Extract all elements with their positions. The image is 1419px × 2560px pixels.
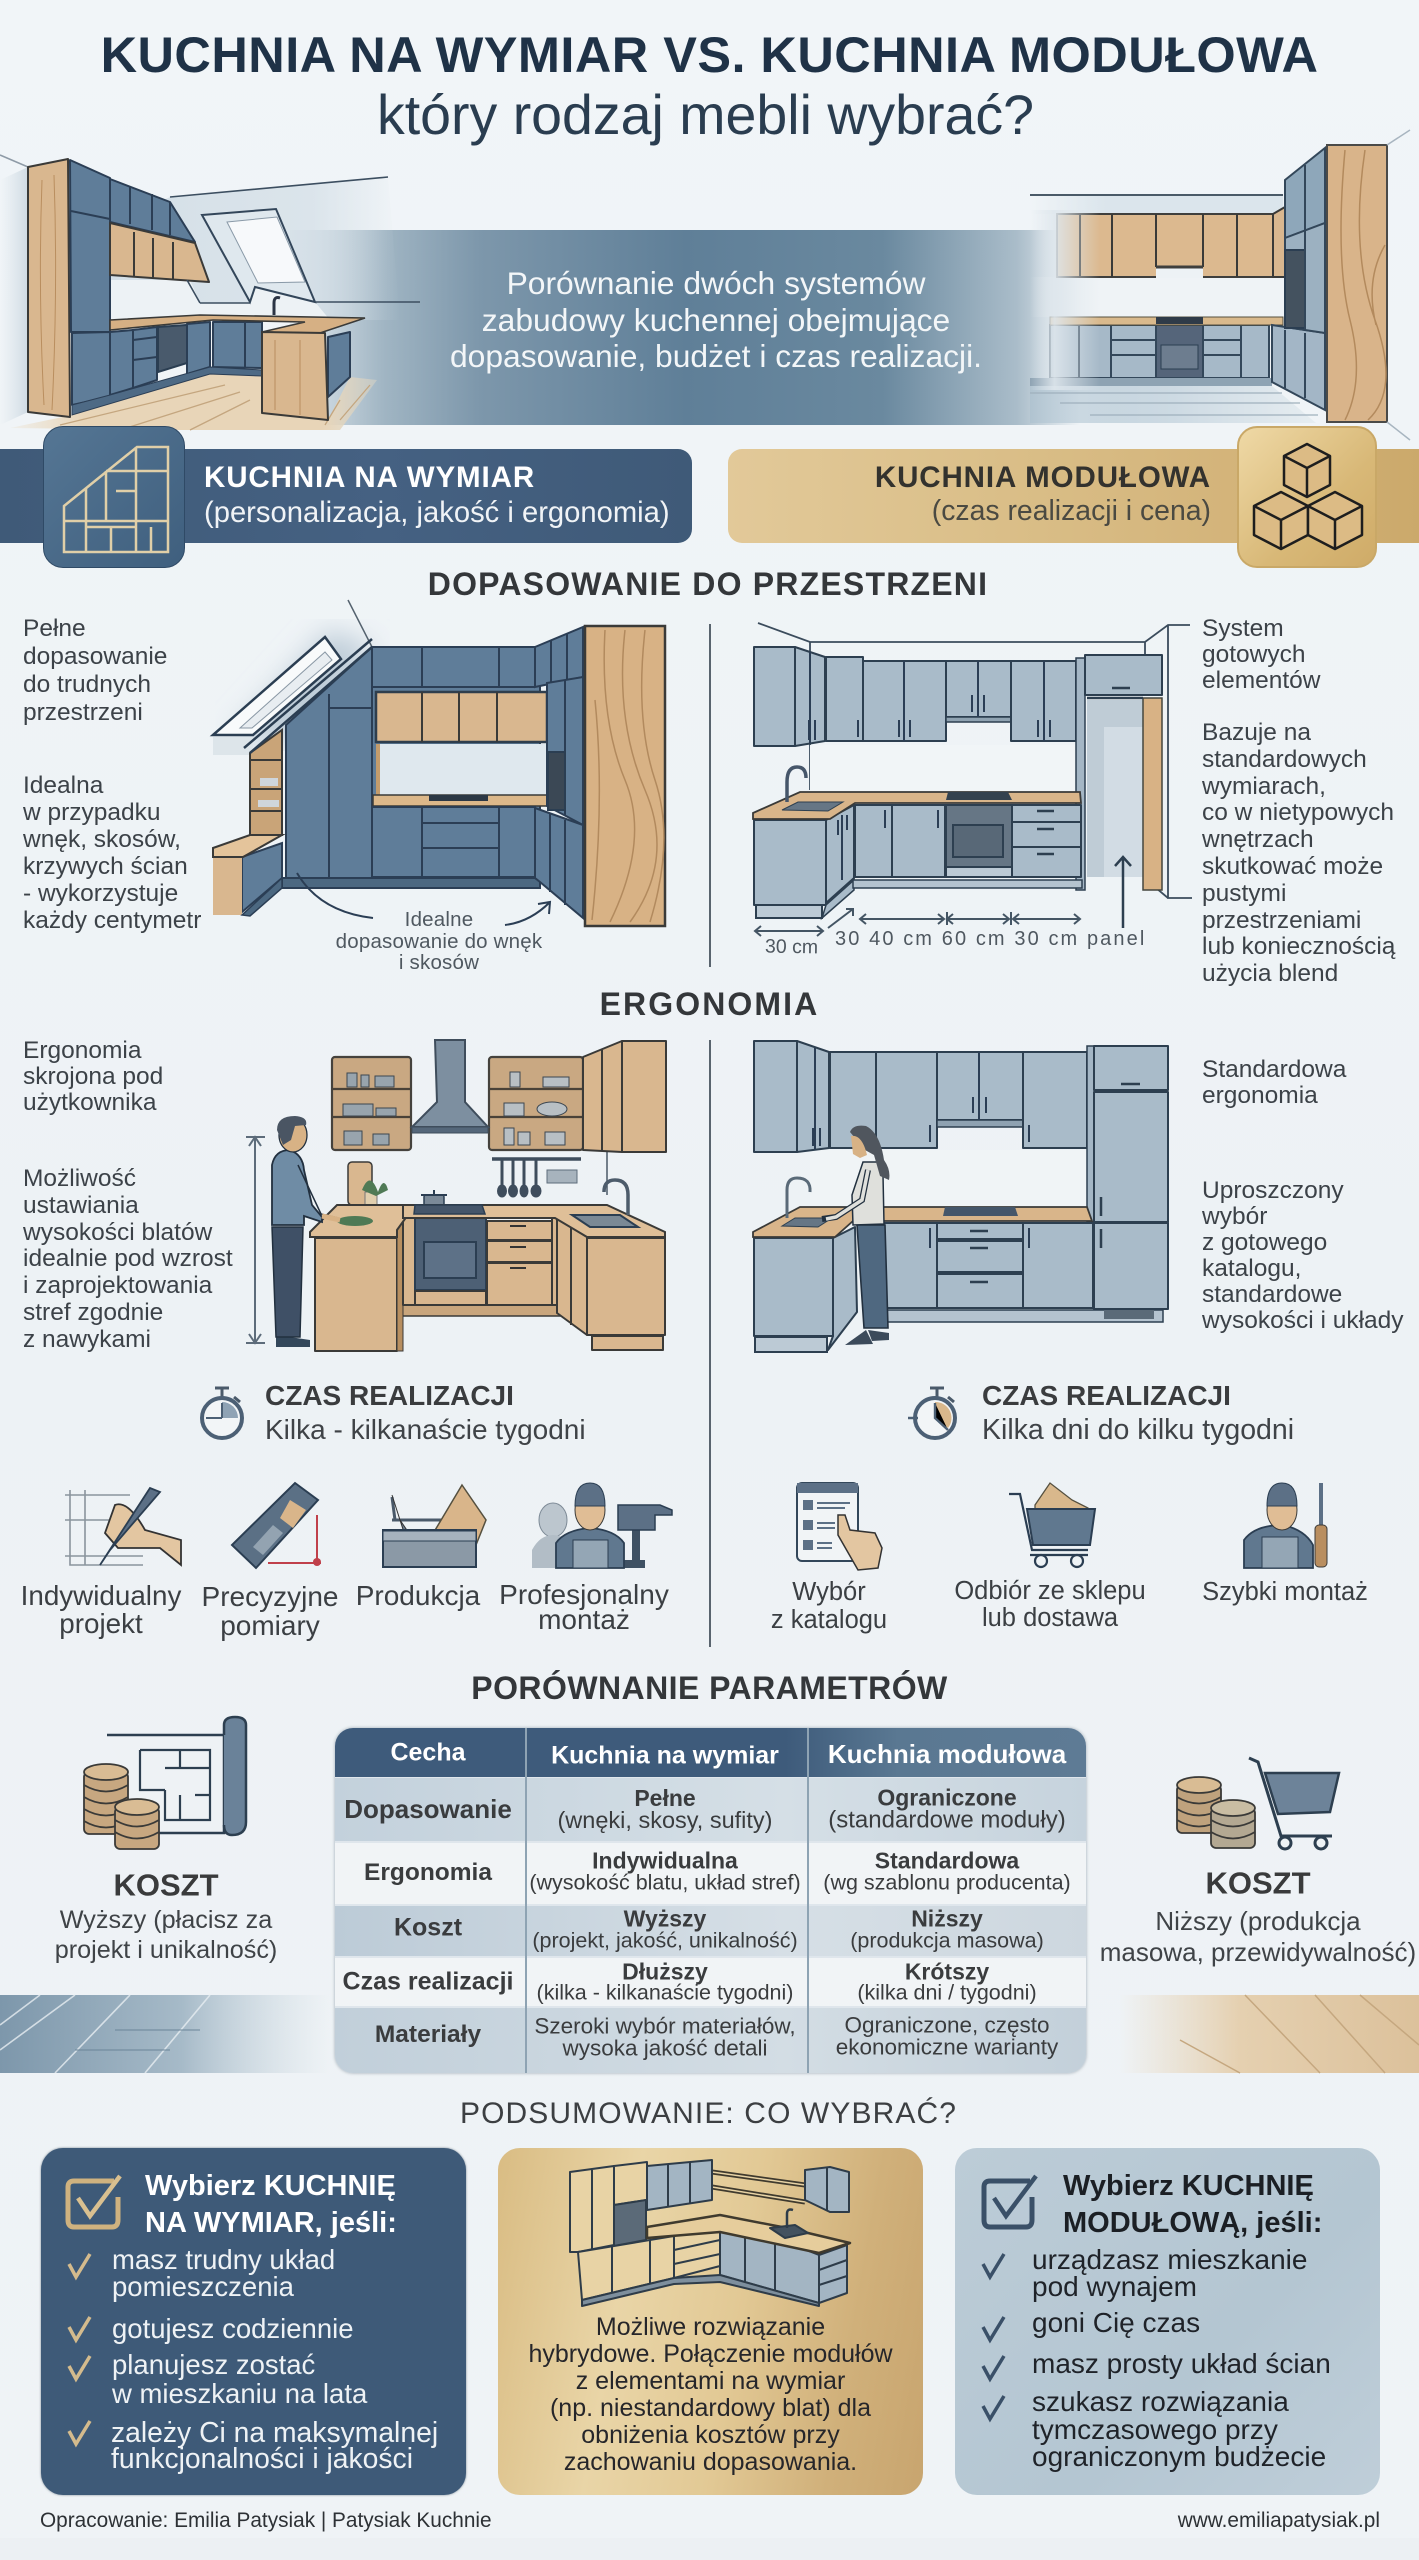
check marks	[980, 2248, 1010, 2548]
label: professional installation: Profesjonalny	[499, 1579, 669, 1610]
list item: w mieszkaniu na lata	[112, 2378, 367, 2409]
heading: cost: KOSZT	[113, 1868, 219, 1902]
divider	[709, 624, 711, 967]
cell: materials: Materiały	[375, 2021, 481, 2048]
header subtext: (personalizacja, jakość i ergonomia)	[204, 497, 670, 529]
illustration: man at wooden kitchen	[246, 1039, 667, 1352]
cell: full: (wnęki, skosy, sufity)	[557, 1807, 773, 1833]
text: higher cost	[16, 1905, 316, 1965]
header: feature: Cecha	[390, 1738, 466, 1766]
cell: higher: Wyższy	[624, 1906, 706, 1932]
cost panel right	[1100, 1750, 1419, 1970]
card heading: Wybierz KUCHNIĘ	[1063, 2170, 1314, 2202]
cell: shorter	[857, 1962, 1037, 2002]
text: standard dimensions	[1202, 719, 1396, 987]
text: countertop height: stref zgodnie	[23, 1299, 163, 1326]
icon: stopwatch	[905, 1385, 959, 1441]
text: ready elements: gotowych	[1202, 641, 1306, 668]
label: custom project: projekt	[59, 1608, 143, 1638]
text: standard dimensions: Bazuje na	[1202, 719, 1311, 746]
list item: planujesz zostać	[112, 2349, 315, 2380]
hero: modular kitchen illustration	[1030, 130, 1410, 440]
cell: limited: Ograniczone	[877, 1784, 1017, 1810]
label: precise measurements: Precyzyjne	[202, 1581, 338, 1612]
list item: pod wynajem	[1032, 2271, 1197, 2302]
text: tailored ergonomics: Ergonomia	[23, 1037, 141, 1064]
text: simplified choice: katalogu,	[1202, 1255, 1301, 1282]
icon: shopping cart	[1005, 1480, 1105, 1570]
text: full fit: przestrzeni	[23, 699, 143, 726]
cell: cost: Koszt	[394, 1914, 462, 1942]
row 1	[335, 1778, 1086, 1841]
row 5	[335, 2008, 1086, 2073]
text: ideal for: w przypadku	[23, 799, 161, 826]
text: ideal for	[23, 772, 201, 934]
cell: individual: (wysokość blatu, układ stref)	[529, 1870, 801, 1894]
hero description: zabudowy kuchennej obejmujące	[482, 302, 950, 338]
text: standard ergonomics: Standardowa	[1202, 1056, 1346, 1083]
cell: limited	[828, 1786, 1066, 1832]
text: standard dimensions: skutkować może	[1202, 853, 1383, 880]
text: full fit: Pełne	[23, 615, 86, 642]
cell: higher: (projekt, jakość, unikalność)	[532, 1928, 798, 1952]
hybrid text: obniżenia kosztów przy	[581, 2421, 840, 2449]
cell: time: Czas realizacji	[343, 1968, 513, 1996]
cell: wide choice: Szeroki wybór materiałów,	[534, 2014, 796, 2038]
panel: fit custom	[23, 600, 666, 974]
list item: tymczasowego przy	[1032, 2414, 1278, 2444]
text: ideal for: każdy centymetr	[23, 907, 201, 934]
hero description: dopasowanie, budżet i czas realizacji.	[450, 338, 982, 374]
hybrid text: z elementami na wymiar	[576, 2367, 845, 2395]
label: custom project: Indywidualny	[21, 1580, 181, 1611]
cell: standard: (wg szablonu producenta)	[823, 1870, 1071, 1894]
hero panel	[0, 130, 1410, 440]
text: simplified choice: wybór	[1202, 1203, 1267, 1230]
cell: shorter: Krótszy	[905, 1958, 989, 1984]
text: lower cost: masowa, przewidywalność)	[1100, 1937, 1416, 1967]
cell: wide choice: wysoka jakość detali	[562, 2035, 768, 2060]
heading: cost: KOSZT	[1205, 1866, 1311, 1900]
label: catalog: z katalogu	[771, 1606, 887, 1634]
text: standard dimensions: wymiarach,	[1202, 773, 1326, 800]
icon: checkbox gold	[63, 2172, 127, 2234]
list item: ograniczonym budżecie	[1032, 2441, 1326, 2472]
text: simplified choice: Uproszczony	[1202, 1177, 1344, 1204]
list item: masz prosty układ ścian	[1032, 2348, 1331, 2379]
label: quick installation: Szybki montaż	[1202, 1578, 1368, 1606]
text: countertop height	[23, 1165, 233, 1353]
illustration: woman at standard kitchen	[752, 1040, 1169, 1353]
text: countertop height: ustawiania	[23, 1192, 139, 1219]
text: simplified choice: standardowe	[1202, 1281, 1342, 1308]
label: custom project	[21, 1580, 182, 1639]
list item: funkcjonalności i jakości	[111, 2442, 413, 2474]
text: ideal for: krzywych ścian	[23, 853, 188, 880]
list item: goni Cię czas	[1032, 2307, 1200, 2338]
text: days to weeks: Kilka dni do kilku tygodni	[982, 1414, 1294, 1446]
cell: wide choice	[534, 2016, 796, 2058]
divider	[709, 1040, 711, 1647]
text: standard ergonomics: ergonomia	[1202, 1082, 1318, 1109]
cell: lower	[850, 1908, 1044, 1952]
card heading	[1063, 2168, 1322, 2242]
cell: full: Pełne	[634, 1785, 696, 1811]
text: lower cost	[1098, 1906, 1418, 1968]
footer: author: Opracowanie: Emilia Patysiak | Patysiak Kuchnie	[40, 2509, 492, 2532]
dimension labels: 30 40 cm 60 cm 30 cm panel	[835, 928, 1146, 950]
heading: ergonomics: ERGONOMIA	[600, 986, 819, 1022]
caption: ideal fit	[336, 908, 542, 974]
text: higher cost: Wyższy (płacisz za	[60, 1906, 272, 1934]
cell: longer	[537, 1962, 793, 2002]
text: full fit: do trudnych	[23, 671, 151, 698]
hybrid text: zachowaniu dopasowania.	[564, 2448, 857, 2476]
heading: time: CZAS REALIZACJI	[982, 1380, 1231, 1411]
list item: gotujesz codziennie	[112, 2313, 354, 2344]
cell: standard: Standardowa	[875, 1848, 1019, 1874]
heading: time: CZAS REALIZACJI	[265, 1380, 514, 1411]
cell: standard	[823, 1850, 1071, 1894]
text: lower cost: Niższy (produkcja	[1155, 1906, 1361, 1936]
cell: individual	[529, 1850, 801, 1894]
row 2	[335, 1843, 1086, 1904]
text: tailored ergonomics	[23, 1037, 163, 1116]
text: ideal for: - wykorzystuje	[23, 880, 178, 907]
icon: checkbox dark	[979, 2172, 1043, 2234]
label: production: Produkcja	[356, 1580, 480, 1611]
icon: toolbox	[382, 1484, 487, 1568]
card list	[112, 2246, 335, 2300]
comparison table	[335, 1728, 1086, 2073]
heading: fit to space: DOPASOWANIE DO PRZESTRZENI	[428, 566, 988, 602]
caption: ideal fit: dopasowanie do wnęk	[336, 930, 542, 953]
check marks	[66, 2248, 96, 2548]
hero description	[450, 265, 982, 374]
text: weeks: Kilka - kilkanaście tygodni	[265, 1414, 586, 1445]
icon: stopwatch	[200, 1386, 244, 1440]
hybrid text: Możliwe rozwiązanie	[596, 2313, 825, 2341]
icon: catalog	[795, 1480, 895, 1570]
cell: limited materials: Ograniczone, często	[844, 2012, 1050, 2038]
icon: laser meter	[230, 1482, 321, 1570]
text: countertop height: wysokości blatów	[23, 1219, 212, 1246]
text: ideal for: Idealna	[23, 772, 103, 799]
column lines	[807, 1728, 808, 2073]
text: simplified choice	[1202, 1177, 1404, 1334]
label: pickup or delivery: lub dostawa	[982, 1604, 1118, 1632]
hero description: Porównanie dwóch systemów	[507, 265, 925, 301]
card heading: MODUŁOWĄ, jeśli:	[1063, 2207, 1322, 2239]
label: catalog: Wybór	[792, 1578, 866, 1606]
card: choose custom	[41, 2148, 466, 2495]
hero: custom kitchen illustration	[0, 154, 420, 431]
label: precise measurements: pomiary	[220, 1610, 320, 1641]
text: countertop height: Możliwość	[23, 1165, 136, 1192]
list item: urządzasz mieszkanie	[1032, 2244, 1307, 2275]
heading: summary: PODSUMOWANIE: CO WYBRAĆ?	[460, 2097, 957, 2130]
header subtext: (czas realizacji i cena)	[932, 495, 1211, 527]
panel: ergonomics custom	[23, 1037, 667, 1353]
icon: cabinet under slope	[43, 426, 185, 568]
panel: ergonomics modular	[752, 1040, 1404, 1353]
list item: szukasz rozwiązania	[1032, 2386, 1289, 2417]
label: pickup or delivery: Odbiór ze sklepu	[954, 1577, 1146, 1605]
cell: individual: Indywidualna	[592, 1848, 738, 1874]
hero band	[290, 230, 1080, 425]
heading: comparison: PORÓWNANIE PARAMETRÓW	[471, 1670, 948, 1706]
header: custom: Kuchnia na wymiar	[551, 1742, 779, 1770]
header text: KUCHNIA MODUŁOWA	[875, 461, 1211, 494]
label: precise measurements	[202, 1581, 338, 1641]
label: professional installation: montaż	[538, 1604, 630, 1635]
text: ready elements: elementów	[1202, 667, 1320, 694]
footer: website: www.emiliapatysiak.pl	[1178, 2509, 1380, 2532]
text: ready elements: System	[1202, 615, 1284, 642]
row 3	[335, 1906, 1086, 1956]
card list: masz trudny układ	[112, 2244, 335, 2275]
list item	[1032, 2246, 1307, 2300]
footer strip	[0, 2538, 1419, 2560]
text: tailored ergonomics: skrojona pod	[23, 1063, 163, 1090]
cell: lower: Niższy	[911, 1906, 983, 1932]
row 4	[335, 1958, 1086, 2006]
hybrid text	[498, 2314, 923, 2475]
text: countertop height: z nawykami	[23, 1326, 151, 1353]
list item	[1032, 2388, 1326, 2470]
text: higher cost: projekt i unikalność)	[55, 1936, 277, 1964]
text: standard dimensions: wnętrzach	[1202, 826, 1314, 853]
text: countertop height: idealnie pod wzrost	[23, 1245, 233, 1272]
panel: time custom	[21, 1380, 673, 1641]
cell: full	[557, 1787, 773, 1831]
illustration: standard kitchen	[752, 622, 1192, 937]
dimension label: 30 cm: 30 cm	[765, 936, 818, 958]
text: simplified choice: z gotowego	[1202, 1229, 1327, 1256]
cell: limited materials	[836, 2014, 1058, 2058]
cell: fit: Dopasowanie	[344, 1794, 512, 1824]
card heading: Wybierz KUCHNIĘ	[145, 2170, 396, 2202]
illustration: L-shaped kitchen	[558, 2158, 858, 2308]
text: full fit: dopasowanie	[23, 643, 167, 670]
icon: cart and coins	[1100, 1750, 1419, 1855]
text: ready elements	[1202, 615, 1320, 694]
floor: tile left	[0, 1995, 330, 2073]
panel: fit modular	[752, 615, 1396, 987]
header bar: custom kitchen	[0, 449, 692, 543]
icon: installer with screwdriver	[1240, 1480, 1340, 1570]
hybrid text: (np. niestandardowy blat) dla	[550, 2394, 871, 2422]
title: KUCHNIA NA WYMIAR VS. KUCHNIA MODUŁOWA	[101, 26, 1318, 83]
label: catalog	[729, 1578, 929, 1634]
text: simplified choice: wysokości i układy	[1202, 1307, 1404, 1334]
label: professional installation	[499, 1579, 669, 1635]
text: countertop height: i zaprojektowania	[23, 1272, 212, 1299]
icon: hand drawing	[65, 1486, 182, 1567]
hybrid text: hybrydowe. Połączenie modułów	[528, 2340, 893, 2368]
cell: longer: (kilka - kilkanaście tygodni)	[537, 1980, 793, 2004]
header text: KUCHNIA NA WYMIAR	[204, 461, 535, 494]
text: standard dimensions: użycia blend	[1202, 960, 1338, 987]
caption: ideal fit: Idealne	[405, 908, 473, 931]
text: full fit	[23, 615, 167, 726]
cost panel left	[30, 1710, 320, 1970]
icon: boxes	[1237, 426, 1377, 568]
table header	[335, 1728, 1086, 1777]
panel: time modular	[710, 1375, 1419, 1640]
text: standard dimensions: co w nietypowych	[1202, 799, 1394, 826]
card: choose modular	[955, 2148, 1380, 2495]
icon: blueprint and coins	[30, 1710, 320, 1860]
label: pickup or delivery	[950, 1578, 1150, 1632]
list item	[112, 2350, 367, 2408]
card heading	[145, 2168, 397, 2242]
cell: shorter: (kilka dni / tygodni)	[857, 1980, 1037, 2004]
text: standard dimensions: przestrzeniami	[1202, 907, 1361, 934]
cell: ergonomics: Ergonomia	[364, 1859, 492, 1886]
subtitle: który rodzaj mebli wybrać?	[377, 84, 1034, 146]
text: standard dimensions: standardowych	[1202, 746, 1367, 773]
cell: higher	[532, 1908, 798, 1952]
text: ideal for: wnęk, skosów,	[23, 826, 181, 853]
text: standard dimensions: pustymi	[1202, 880, 1286, 907]
header bar: modular kitchen	[728, 449, 1419, 543]
text: standard ergonomics	[1202, 1056, 1346, 1109]
cell: longer: Dłuższy	[622, 1958, 708, 1984]
card: hybrid	[498, 2148, 923, 2495]
caption: ideal fit: i skosów	[399, 951, 479, 974]
list item: zależy Ci na maksymalnej	[111, 2416, 438, 2448]
illustration: attic kitchen	[210, 600, 666, 928]
cell: limited materials: ekonomiczne warianty	[836, 2034, 1058, 2059]
column lines	[525, 1728, 526, 2073]
floor: wood right	[1120, 1995, 1419, 2073]
cell: limited: (standardowe moduły)	[828, 1806, 1066, 1834]
list item	[111, 2420, 438, 2471]
icon: installers with drill	[532, 1482, 673, 1569]
card heading: NA WYMIAR, jeśli:	[145, 2207, 397, 2239]
card list: pomieszczenia	[112, 2271, 294, 2302]
header: modular: Kuchnia modułowa	[828, 1739, 1066, 1769]
text: tailored ergonomics: użytkownika	[23, 1089, 156, 1116]
text: standard dimensions: lub koniecznością	[1202, 933, 1395, 960]
cell: lower: (produkcja masowa)	[850, 1928, 1044, 1952]
